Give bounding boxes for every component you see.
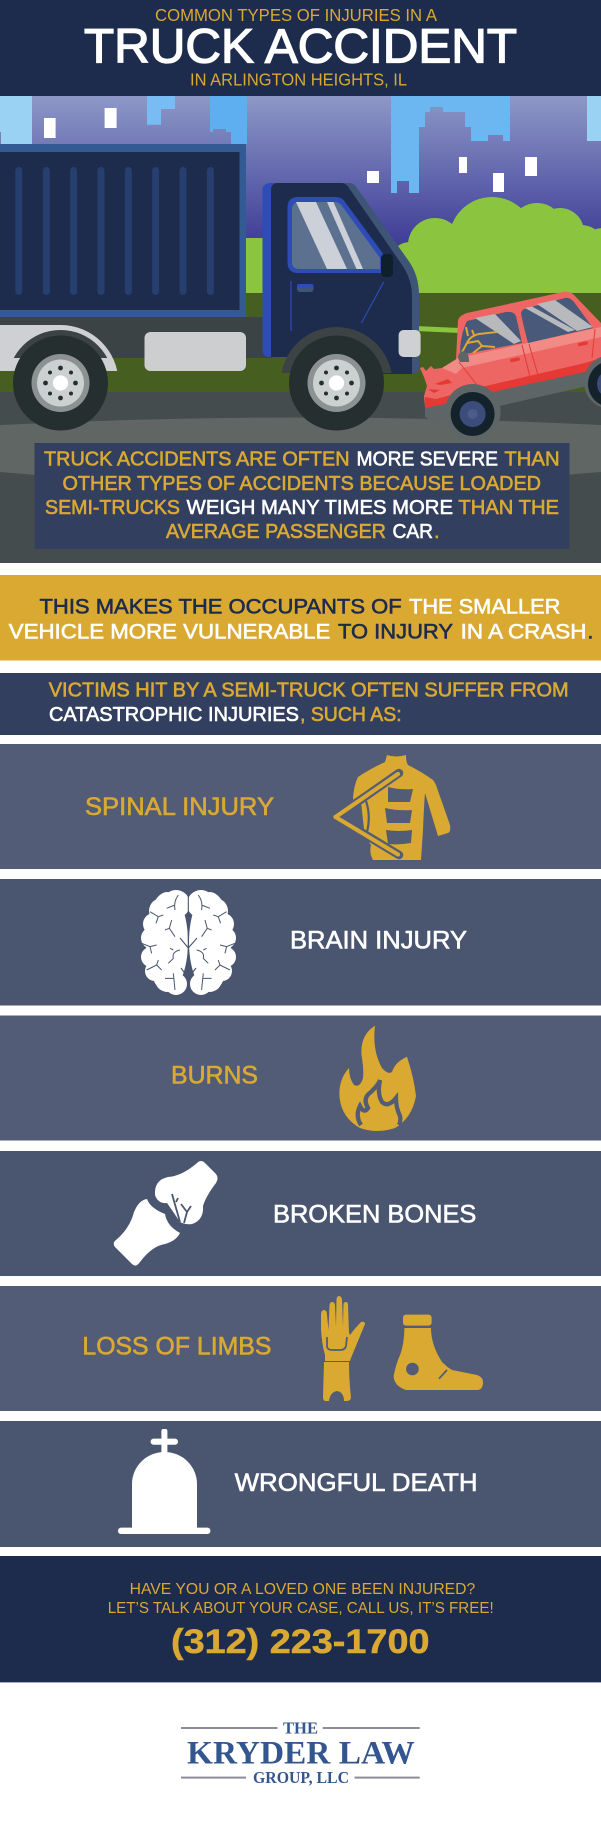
logo: The Kryder Law Group: THE xyxy=(283,1719,318,1738)
gold banner: vulnerability statement: TO INJURY xyxy=(338,621,453,644)
text box: severity statement: CAR xyxy=(392,521,433,543)
road highlight xyxy=(0,418,601,485)
gold banner: vulnerability statement: . xyxy=(588,621,593,644)
red lower strip xyxy=(425,358,601,408)
panel: loss of limbs xyxy=(0,1286,601,1411)
illustration: truck crash scene xyxy=(0,96,601,563)
gold banner: vulnerability statement xyxy=(0,575,601,660)
panel: broken bones xyxy=(0,1151,601,1276)
call to action banner xyxy=(0,1556,601,1682)
icon: broken bone xyxy=(114,1161,218,1266)
cargo box xyxy=(0,144,246,317)
green bushes xyxy=(241,197,601,298)
panel: brain injury xyxy=(0,879,601,1006)
icon: prosthetic hand xyxy=(321,1296,365,1401)
label: wrongful death: WRONGFUL DEATH xyxy=(235,1469,478,1497)
text box: severity statement: . xyxy=(434,521,440,543)
bumper xyxy=(399,330,421,357)
navy banner: catastrophic injuries intro xyxy=(0,673,601,735)
panel: spinal injury xyxy=(0,744,601,869)
truck xyxy=(0,144,421,441)
text box: severity statement: TRUCK ACCIDENTS ARE OFTEN xyxy=(44,449,350,471)
navy banner: catastrophic injuries intro: , SUCH AS: xyxy=(300,704,402,726)
phone number: (312) 223-1700 xyxy=(171,1623,430,1661)
car body xyxy=(420,292,601,410)
label: loss of limbs: LOSS OF LIMBS xyxy=(82,1332,271,1360)
label: broken bones: BROKEN BONES xyxy=(273,1200,476,1228)
icon: tombstone xyxy=(118,1429,210,1534)
header banner xyxy=(0,0,601,96)
windshield cracks xyxy=(461,327,497,354)
car front wheel xyxy=(451,392,495,436)
truck chassis xyxy=(0,317,272,358)
gold banner: vulnerability statement: THE SMALLER xyxy=(409,595,560,618)
side mirror xyxy=(381,254,393,277)
rear fender xyxy=(0,325,118,371)
text box: severity statement: THAN xyxy=(504,449,560,471)
title: main heading: TRUCK ACCIDENT xyxy=(84,21,517,74)
label: brain injury: BRAIN INJURY xyxy=(290,926,467,954)
front wheel xyxy=(289,336,384,430)
front window xyxy=(460,312,522,355)
gold banner: vulnerability statement: VEHICLE MORE VULNERABLE xyxy=(9,621,330,644)
navy banner: catastrophic injuries intro: CATASTROPHIC INJURIES xyxy=(49,704,299,726)
text box: severity statement: SEMI-TRUCKS xyxy=(45,497,180,519)
city skyline background xyxy=(0,96,601,296)
car mirror xyxy=(458,351,469,362)
text box: severity statement: WEIGH MANY TIMES MORE xyxy=(187,497,453,519)
text box: severity statement: AVERAGE PASSENGER xyxy=(166,521,386,543)
door handle xyxy=(297,284,314,292)
car wheel arch xyxy=(445,384,501,440)
grey sill xyxy=(425,360,601,424)
car rear wheel xyxy=(584,355,601,409)
pink door band xyxy=(442,327,601,374)
text box: severity statement: OTHER TYPES OF ACCIDENTS BECAUSE LOADED xyxy=(62,473,541,495)
title: kicker line: COMMON TYPES OF INJURIES IN A xyxy=(155,5,437,25)
icon: flame xyxy=(339,1026,416,1131)
navy banner: catastrophic injuries intro: VICTIMS HIT BY A SEMI-TRUCK OFTEN SUFFER FROM xyxy=(49,680,569,702)
rear window xyxy=(521,298,593,343)
gold banner: vulnerability statement: THIS MAKES THE OCCUPANTS OF xyxy=(40,595,402,618)
call to action banner: LET’S TALK ABOUT YOUR CASE, CALL US, IT’S FREE! xyxy=(108,1600,494,1617)
panel: burns xyxy=(0,1016,601,1140)
call to action banner: HAVE YOU OR A LOVED ONE BEEN INJURED? xyxy=(130,1581,475,1598)
door details xyxy=(459,329,595,385)
fuel tank xyxy=(144,332,246,371)
rear wheel xyxy=(13,336,108,430)
gold banner: vulnerability statement: IN A CRASH xyxy=(461,621,586,644)
panel: wrongful death xyxy=(0,1421,601,1547)
front wheel arch xyxy=(282,327,392,373)
text box: severity statement: THAN THE xyxy=(458,497,559,519)
text box: severity statement: MORE SEVERE xyxy=(356,449,498,471)
logo: The Kryder Law Group: GROUP, LLC xyxy=(253,1768,349,1787)
logo: The Kryder Law Group: KRYDER LAW xyxy=(187,1736,415,1772)
road xyxy=(0,392,601,563)
label: spinal injury: SPINAL INJURY xyxy=(85,793,274,821)
crashed red car xyxy=(420,292,601,440)
icon: prosthetic foot xyxy=(394,1315,483,1390)
text box: severity statement xyxy=(34,443,570,549)
label: burns: BURNS xyxy=(171,1061,258,1089)
cab window xyxy=(288,197,384,273)
grass band xyxy=(0,293,601,392)
icon: spine in torso xyxy=(336,755,450,860)
cab xyxy=(262,183,421,374)
title: location line: IN ARLINGTON HEIGHTS, IL xyxy=(190,69,407,89)
logo: The Kryder Law Group xyxy=(181,1719,420,1787)
light green strip xyxy=(415,326,460,333)
icon: brain xyxy=(141,890,236,996)
